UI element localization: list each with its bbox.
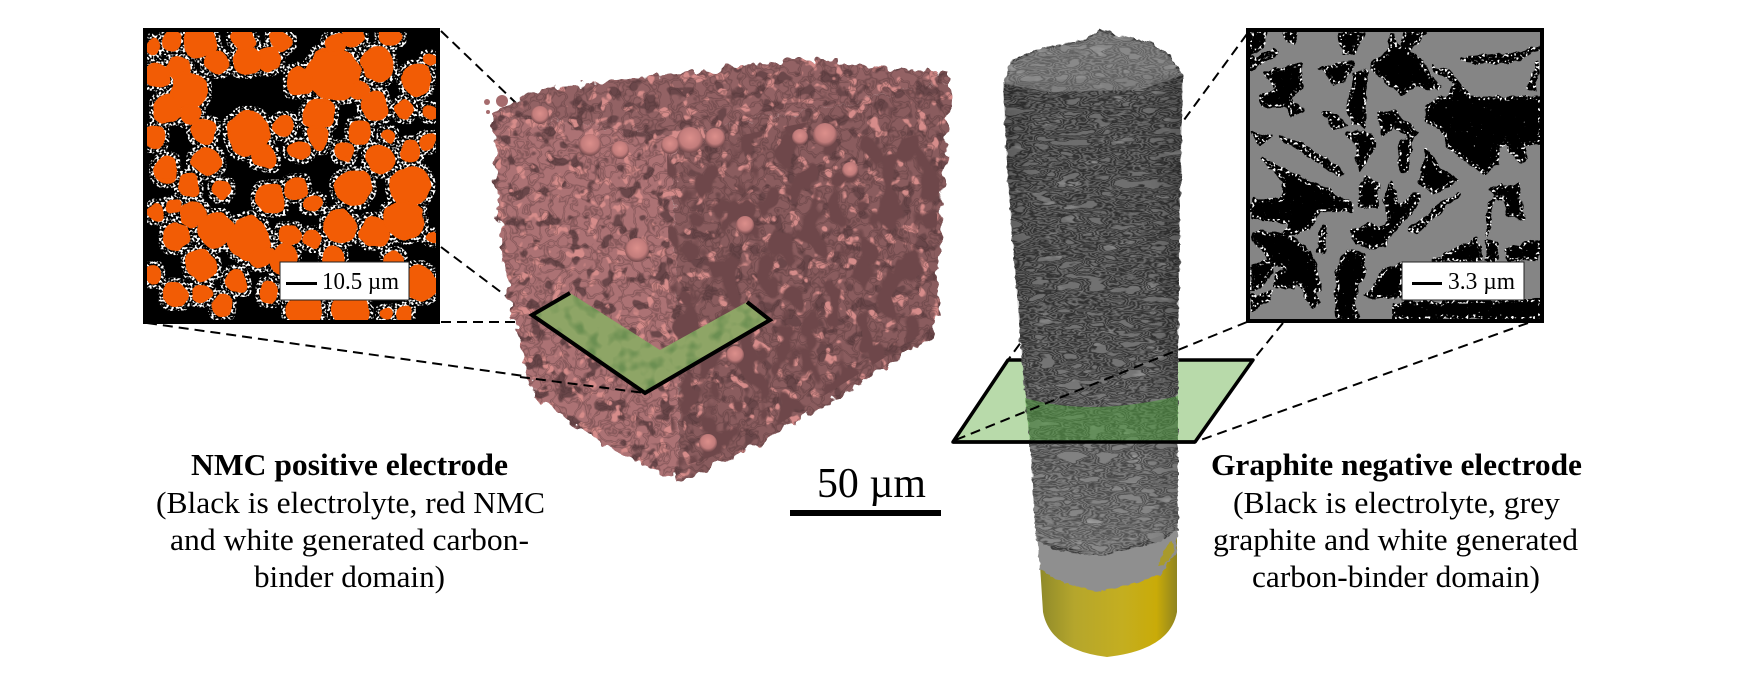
green section plane: graphite [953,360,1253,442]
dashed line over cube [520,377,645,393]
dashed line over column [953,322,1247,441]
inset border [1248,30,1542,321]
cube body [492,60,950,482]
text block: Graphite negative electrode: (Black is electrolyte, grey [1233,485,1561,520]
scale box: 3.3 µm [1402,262,1524,300]
black electrolyte regions with white speckle [1250,33,1540,318]
scale bar: 50 µm: 50 µm [817,461,926,507]
inset border [145,30,438,322]
plane front edge over column [953,440,1195,444]
panel: graphite cross-section inset [1248,30,1542,321]
text block: NMC positive electrode: and white generated carbon- [170,522,529,557]
text block: NMC positive electrode [156,447,545,594]
textured graphite column [1003,29,1183,556]
text block: NMC positive electrode: NMC positive electrode [191,447,508,482]
3D render: graphite negative electrode cylinder [953,29,1247,657]
text block: Graphite negative electrode: carbon-binder domain) [1252,559,1540,594]
scale box: 10.5 µm: 10.5 µm [322,269,399,295]
text block: NMC positive electrode: binder domain) [254,559,445,594]
column edge shading and vertical fade [1003,74,1183,556]
text block: Graphite negative electrode: Graphite negative electrode [1211,447,1582,482]
dashed leader lines: NMC inset to cube [147,31,645,393]
stray particles and highlighted spheres [484,95,858,452]
yellow current collector [1040,530,1177,657]
flat dark cut particles on right face [667,95,945,470]
grey ring [1036,525,1178,592]
green section plane (V shape) [532,293,770,393]
green band on column [1025,396,1178,441]
text block: Graphite negative electrode: graphite and white generated [1213,522,1579,557]
scale box: 3.3 µm: 3.3 µm [1448,269,1515,295]
3D render: NMC positive electrode cube [484,60,950,482]
scale bar: 50 µm [790,461,941,516]
orange NMC particles [145,27,437,328]
scale box: 10.5 µm [280,262,409,300]
panel: NMC cross-section inset [145,27,438,328]
lighter top surface [1005,31,1180,92]
yellow fleck on ring [1158,541,1175,566]
text block: NMC positive electrode: (Black is electrolyte, red NMC [156,485,545,520]
dashed leader lines: graphite inset to plane [1008,34,1528,442]
text block: Graphite negative electrode [1211,447,1582,594]
